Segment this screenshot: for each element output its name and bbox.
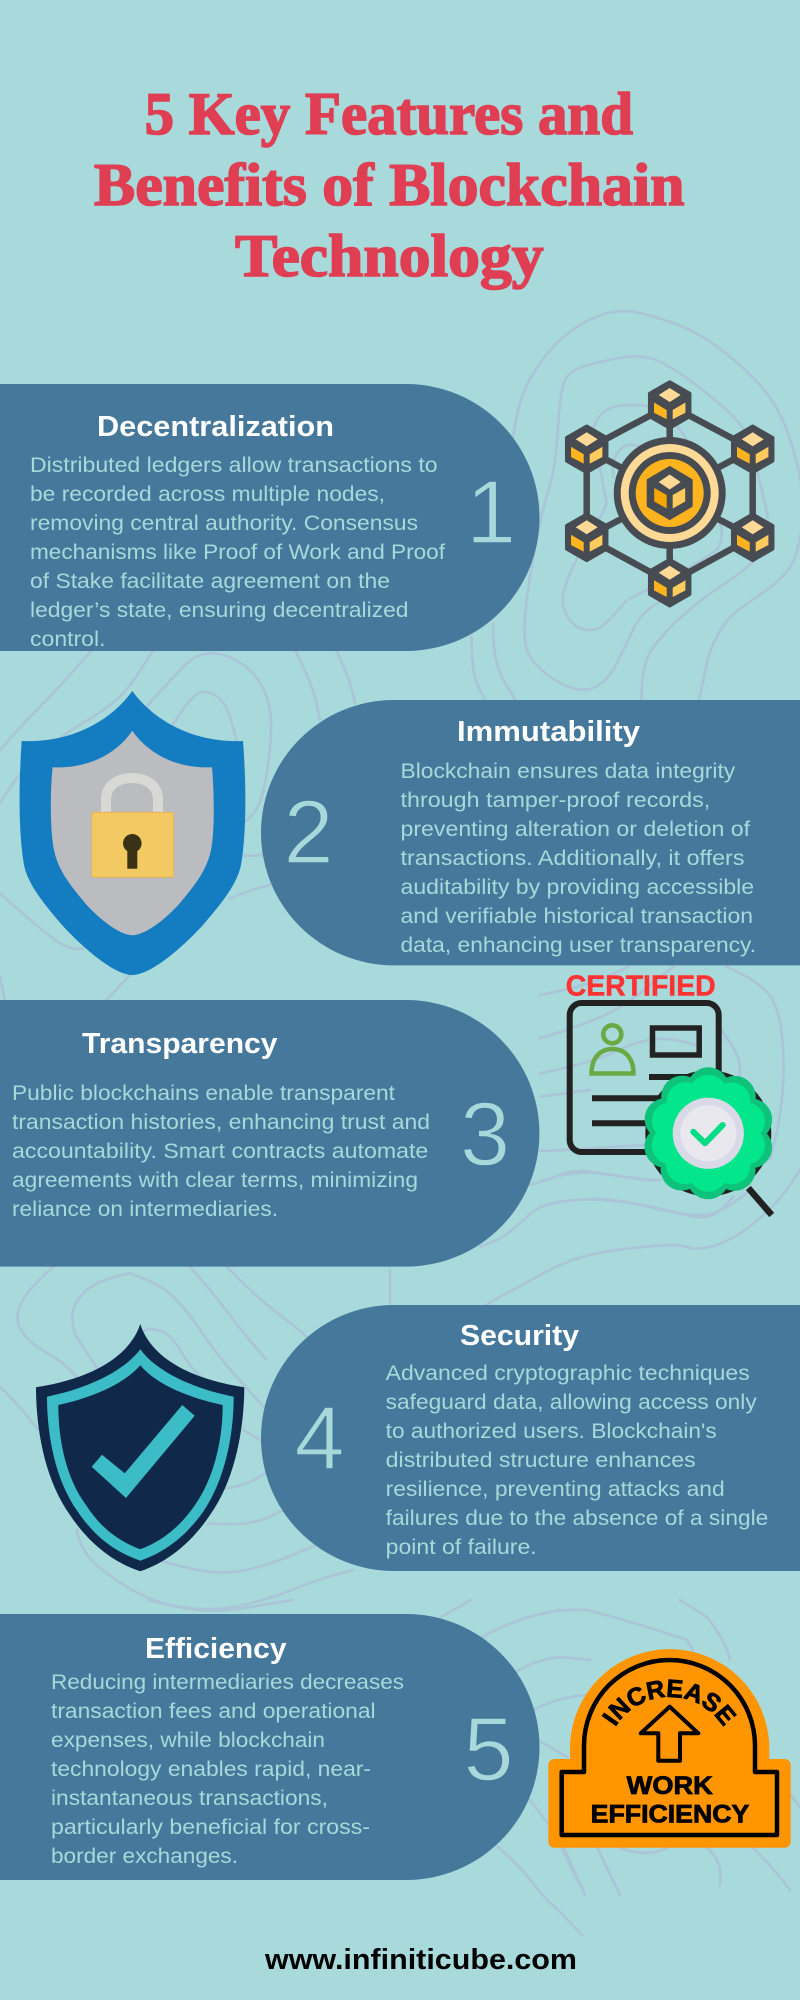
body text: security: resilience, preventing attacks and: [386, 1478, 725, 1501]
body text: immutability: data, enhancing user transparency.: [400, 934, 756, 957]
body text: efficiency: border exchanges.: [51, 1845, 238, 1868]
panel: transparency: [0, 1000, 539, 1267]
sign text: work: WORK: [627, 1772, 713, 1800]
body text: transparency: agreements with clear terms, minimizing: [12, 1169, 418, 1192]
body text: security: Advanced cryptographic techniques: [386, 1362, 750, 1385]
body text: transparency: accountability. Smart contracts automate: [12, 1140, 428, 1163]
body text: decentralization: [30, 454, 445, 651]
body text: transparency: transaction histories, enhancing trust and: [12, 1111, 430, 1134]
icon: navy shield with check mark: [36, 1324, 244, 1571]
body text: decentralization: ledger’s state, ensuring decentralized: [30, 599, 408, 622]
body text: transparency: reliance on intermediaries.: [12, 1198, 278, 1221]
number 1: 1: [466, 463, 516, 563]
title: Benefits of Blockchain: [94, 152, 684, 218]
body text: security: distributed structure enhances: [386, 1449, 696, 1472]
body text: efficiency: transaction fees and operational: [51, 1700, 376, 1723]
icon: increase work efficiency sign: [548, 1649, 791, 1848]
heading: efficiency: Efficiency: [145, 1633, 286, 1665]
body text: immutability: through tamper-proof records,: [400, 789, 710, 812]
body text: security: safeguard data, allowing access only: [386, 1391, 757, 1414]
body text: efficiency: expenses, while blockchain: [51, 1729, 325, 1752]
panel: efficiency: [0, 1614, 540, 1880]
body text: efficiency: Reducing intermediaries decreases: [51, 1671, 404, 1694]
sign text: efficiency: EFFICIENCY: [591, 1800, 750, 1828]
sign text: increase: INCREASE: [602, 1679, 737, 1727]
heading: security: Security: [460, 1320, 579, 1352]
panel: immutability: [261, 700, 800, 965]
heading: transparency: Transparency: [82, 1028, 278, 1060]
label: certified: CERTIFIED: [566, 971, 716, 1003]
panel: decentralization: [0, 384, 540, 651]
body text: decentralization: control.: [30, 628, 106, 651]
body text: immutability: Blockchain ensures data integrity: [400, 760, 736, 783]
body text: decentralization: be recorded across multiple nodes,: [30, 483, 385, 506]
body text: decentralization: Distributed ledgers allow transactions to: [30, 454, 438, 477]
body text: security: point of failure.: [386, 1536, 537, 1559]
body text: decentralization: mechanisms like Proof of Work and Proof: [30, 541, 445, 564]
body text: immutability: [400, 760, 756, 957]
body text: transparency: Public blockchains enable transparent: [12, 1082, 395, 1105]
body text: efficiency: instantaneous transactions,: [51, 1787, 328, 1810]
title: [94, 81, 684, 289]
heading: immutability: Immutability: [457, 716, 640, 748]
panel: security: [261, 1305, 800, 1571]
body text: efficiency: [51, 1671, 404, 1868]
title: 5 Key Features and: [145, 81, 633, 147]
number 3: 3: [460, 1085, 510, 1185]
heading: decentralization: Decentralization: [97, 411, 334, 443]
number 5: 5: [463, 1700, 514, 1800]
body text: immutability: auditability by providing accessible: [400, 876, 754, 899]
body text: efficiency: particularly beneficial for cross-: [51, 1816, 370, 1839]
number 4: 4: [294, 1389, 345, 1489]
title: Technology: [235, 223, 544, 289]
body text: security: failures due to the absence of a single: [386, 1507, 768, 1530]
number 2: 2: [283, 783, 334, 883]
body text: decentralization: removing central authority. Consensus: [30, 512, 418, 535]
body text: immutability: preventing alteration or deletion of: [400, 818, 750, 841]
body text: security: [386, 1362, 768, 1559]
icon: blue shield with padlock: [20, 691, 245, 975]
icon: certified document with badge: [566, 971, 772, 1215]
body text: decentralization: of Stake facilitate agreement on the: [30, 570, 390, 593]
body text: transparency: [12, 1082, 430, 1221]
body text: immutability: and verifiable historical transaction: [400, 905, 753, 928]
website url: www.infiniticube.com: [264, 1944, 577, 1976]
body text: security: to authorized users. Blockchain's: [386, 1420, 717, 1443]
body text: efficiency: technology enables rapid, near-: [51, 1758, 371, 1781]
body text: immutability: transactions. Additionally, it offers: [400, 847, 744, 870]
icon: blockchain network: [567, 382, 773, 606]
